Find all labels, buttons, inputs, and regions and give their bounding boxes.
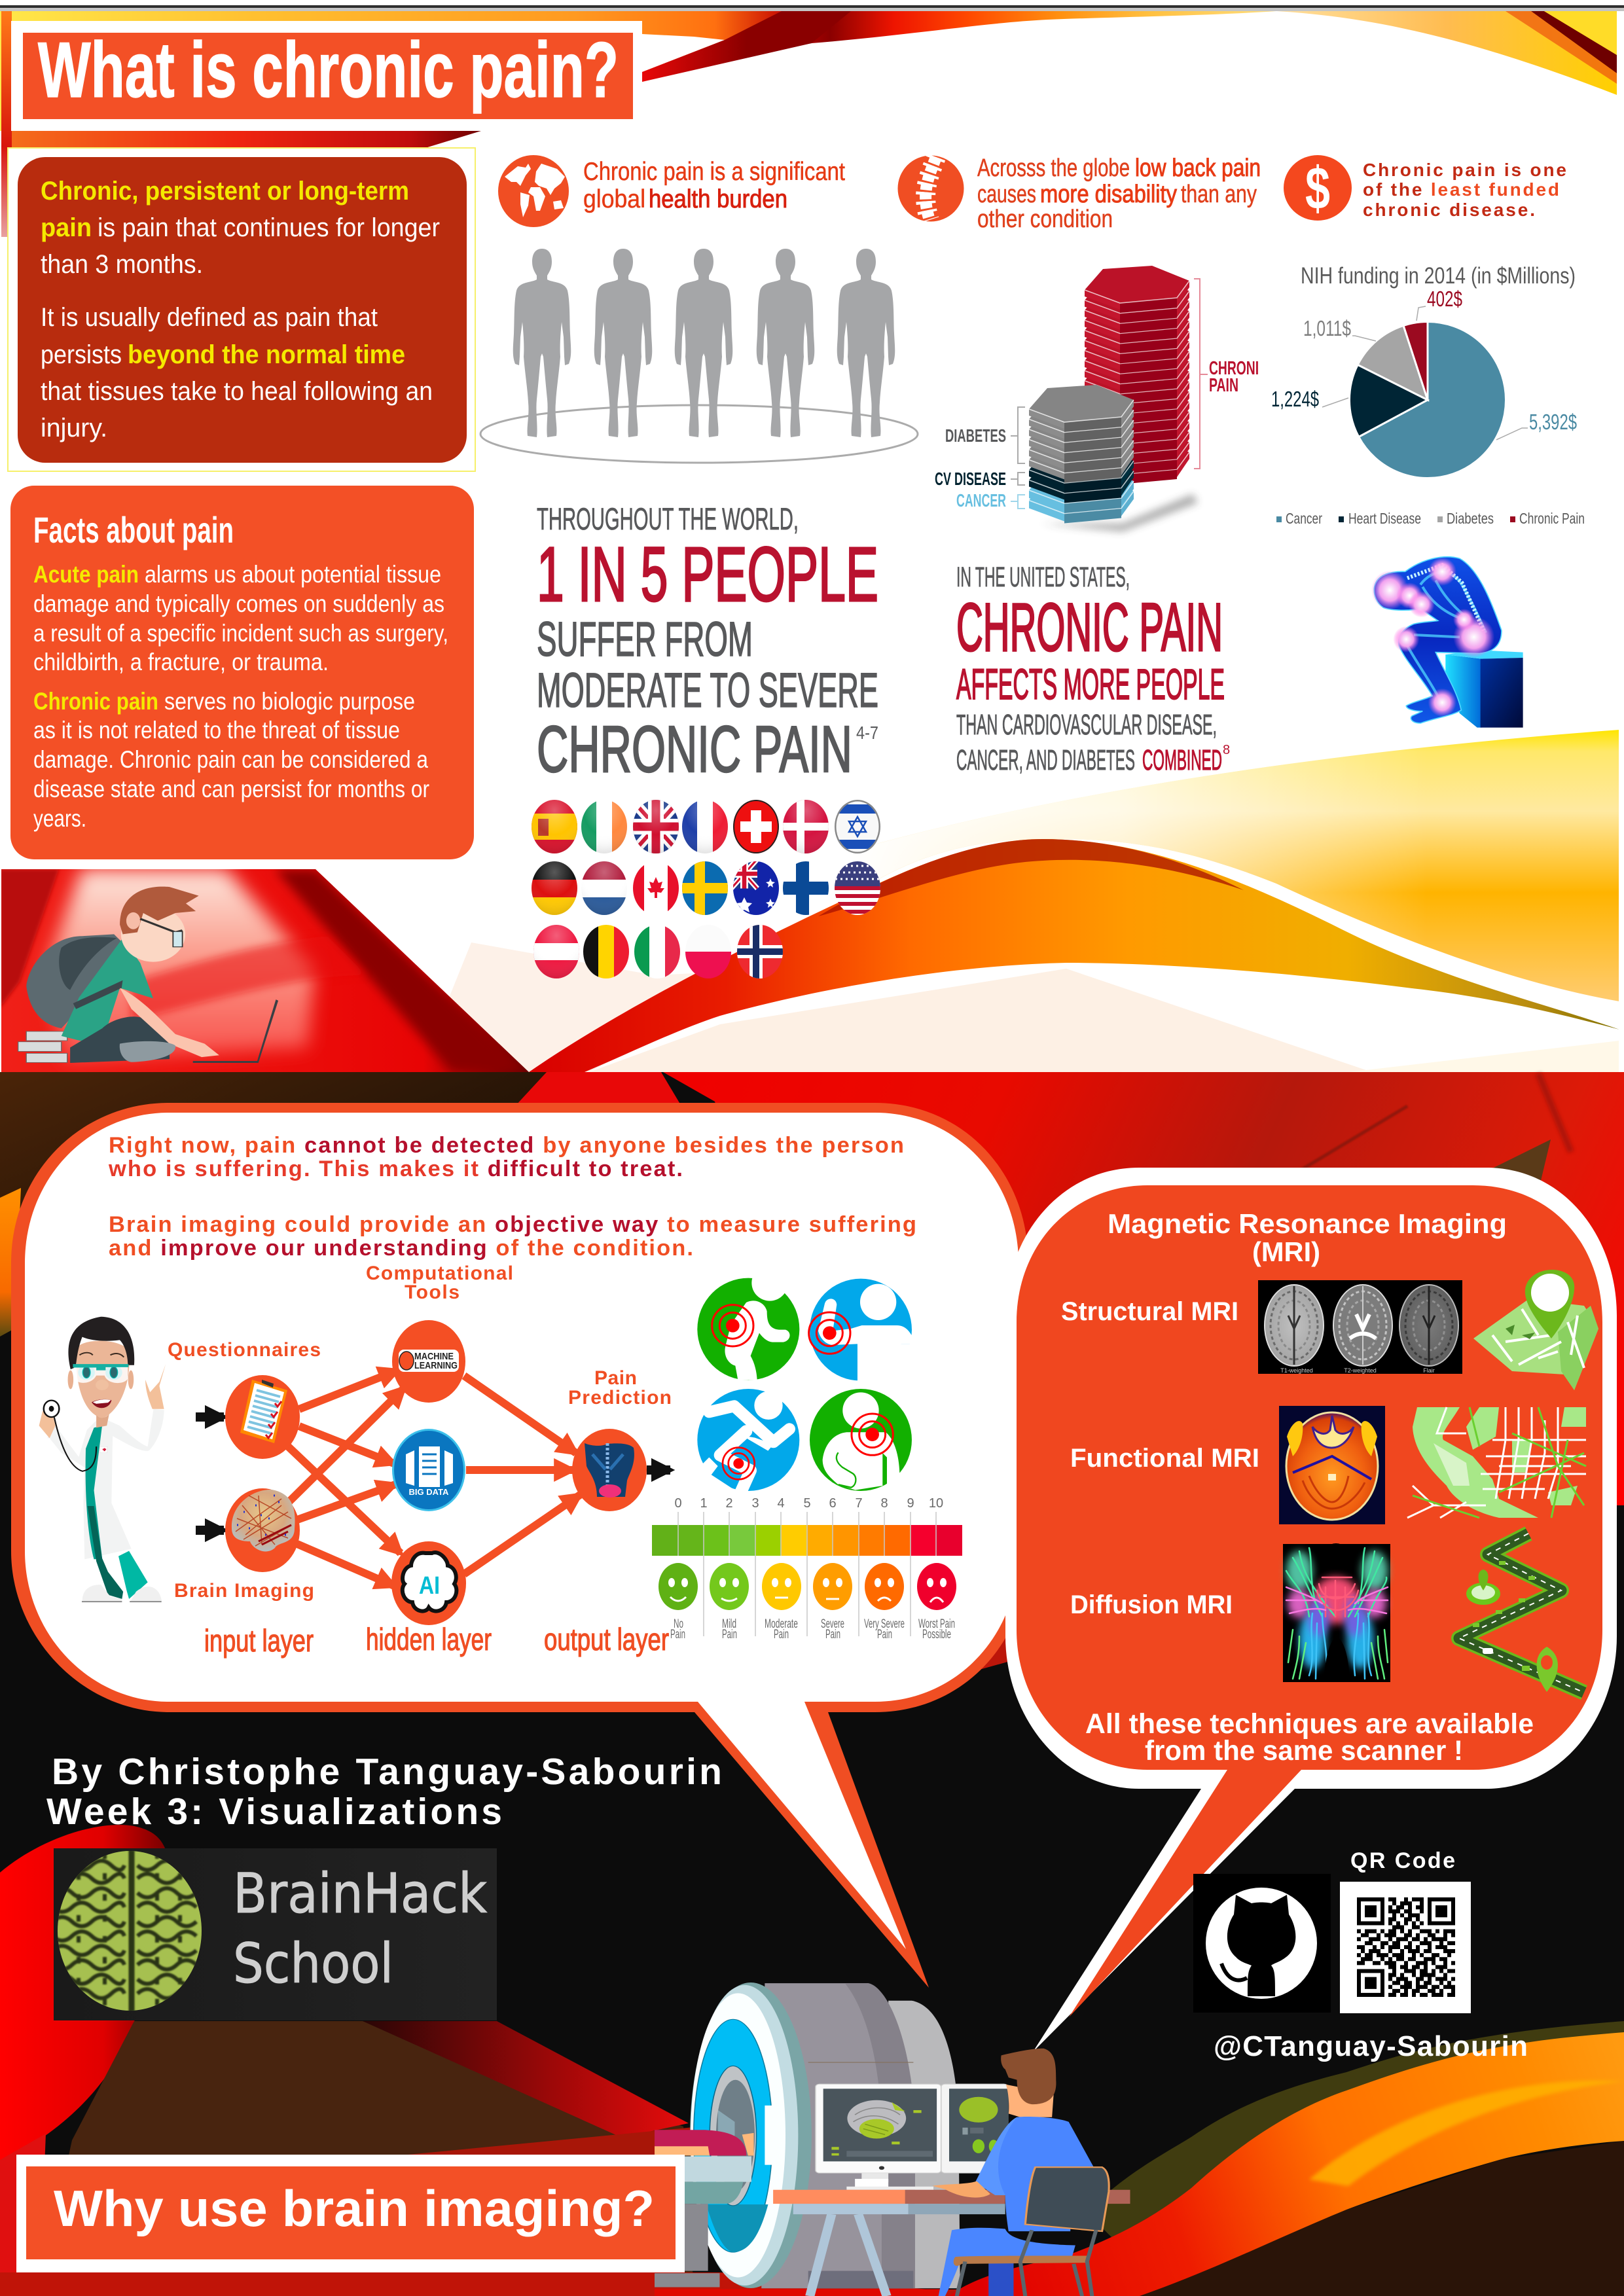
figure: five human silhouettes on ellipse: [480, 249, 918, 463]
chart: NIH funding pie: 402$: [1427, 287, 1462, 311]
labels: network diagram: output layer: [544, 1622, 669, 1657]
statistic: affects more people: COMBINED: [1142, 744, 1222, 776]
text: same scanner: from the same scanner !: [1145, 1735, 1463, 1767]
text: same scanner: All these techniques are available: [1085, 1708, 1534, 1740]
text: global health burden: health burden: [649, 185, 787, 213]
node: artificial intelligence: AI: [419, 1572, 440, 1600]
author credit: By Christophe Tanguay-Sabourin: [52, 1751, 722, 1793]
panel: chronic pain definition: beyond the normal time: [128, 340, 405, 369]
labels: network diagram: Questionnaires: [168, 1339, 321, 1361]
row: structural MRI: T1-weighted: [1280, 1367, 1313, 1374]
chart: hexagon stacks by prevalence: [935, 266, 1268, 531]
panel: chronic pain definition: pain: [41, 213, 92, 242]
input arrows: [196, 1417, 670, 1530]
panel: chronic pain definition: injury.: [41, 414, 107, 442]
panel: chronic pain definition: Chronic, persistent or long-term: [41, 177, 409, 206]
panel: chronic pain definition: It is usually defined as pain that: [41, 303, 378, 332]
statistic: 1 in 5 people: CHRONIC PAIN: [537, 713, 852, 786]
logo: BrainHack School: [52, 1848, 497, 2020]
handle: CTanguay-Sabourin: @CTanguay-Sabourin: [1214, 2030, 1528, 2062]
text: global health burden: [583, 158, 845, 213]
node: machine learning: [392, 1320, 465, 1403]
chart: hexagon stacks by prevalence: CANCER: [956, 490, 1006, 511]
row: diffusion MRI: Diffusion MRI: [1070, 1590, 1233, 1619]
row: structural MRI: [1061, 1280, 1462, 1374]
title banner: What is chronic pain?: What is chronic pain?: [38, 26, 619, 114]
statistic: 1 in 5 people: 4-7: [856, 723, 878, 743]
panel: facts about pain: disease state and can persist for months or: [33, 776, 429, 802]
icon: dollar: $: [1305, 155, 1330, 222]
text: global health burden: Chronic pain is a significant: [583, 158, 845, 186]
text: global health burden: global: [583, 185, 645, 213]
panel: chronic pain definition: than 3 months.: [41, 250, 203, 279]
title banner: Why use brain imaging?: Why use brain imaging?: [54, 2179, 655, 2237]
text: MRI panel heading: [1108, 1208, 1507, 1267]
text: low back pain: low back pain: [1135, 154, 1261, 182]
labels: network diagram: input layer: [204, 1623, 314, 1658]
text: bubble introduction: Brain imaging could provide an objective way to measure suffering: [109, 1212, 916, 1237]
pain scale 0-10: 2: [725, 1496, 733, 1511]
text: bubble introduction: who is suffering. This makes it difficult to treat.: [108, 1157, 683, 1181]
chart: NIH funding pie: Diabetes: [1447, 510, 1494, 527]
speech bubble: MRI panel: [1005, 1168, 1617, 2052]
title banner: What is chronic pain?: [11, 21, 642, 131]
illustration: student with laptop: [18, 887, 278, 1063]
pain scale 0-10: 5: [803, 1496, 811, 1511]
logo: BrainHack School: School: [233, 1931, 393, 1996]
text: bubble introduction: Right now, pain cannot be detected by anyone besides the person: [109, 1133, 904, 1158]
statistic: affects more people: [956, 562, 1230, 776]
labels: network diagram: Computational: [366, 1263, 513, 1284]
labels: network diagram: hidden layer: [366, 1622, 492, 1657]
logo: BrainHack School: BrainHack: [233, 1861, 487, 1926]
icons: body pain targets: [697, 1265, 914, 1492]
text: low back pain: Acrosss the globe: [977, 154, 1130, 182]
pain scale 0-10: Pain: [877, 1628, 892, 1641]
statistic: affects more people: AFFECTS MORE PEOPLE: [956, 660, 1225, 708]
author credit: [46, 1751, 722, 1833]
text: least funded: [1363, 160, 1566, 220]
QR code: [1340, 1882, 1471, 2013]
author credit: Week 3: Visualizations: [46, 1791, 502, 1833]
labels: network diagram: [168, 1263, 672, 1658]
pain scale 0-10: 3: [751, 1496, 759, 1511]
panel: chronic pain definition: [8, 148, 475, 471]
chart: hexagon stacks by prevalence: PAIN: [1209, 375, 1238, 396]
statistic: 1 in 5 people: [537, 501, 878, 786]
row: functional MRI: [1070, 1406, 1385, 1524]
pain scale 0-10: Pain: [722, 1628, 737, 1641]
pain scale 0-10: 4: [777, 1496, 785, 1511]
panel: facts about pain: [10, 486, 474, 859]
row: structural MRI: T2-weighted: [1344, 1367, 1377, 1374]
labels: network diagram: Tools: [405, 1282, 460, 1303]
statistic: affects more people: THAN CARDIOVASCULAR DISEASE,: [956, 709, 1217, 741]
panel: facts about pain: serves no biologic purpose: [164, 688, 415, 715]
pain scale 0-10: Pain: [825, 1628, 840, 1641]
icon: city map: [1407, 1407, 1586, 1518]
pain scale 0-10: Mild: [722, 1617, 736, 1631]
labels: network diagram: Prediction: [568, 1387, 672, 1408]
node: big data: BIG DATA: [409, 1487, 449, 1497]
panel: facts about pain: Chronic pain: [33, 688, 158, 715]
pain scale 0-10: Very Severe: [864, 1617, 905, 1631]
icon: winding road: [1459, 1534, 1584, 1693]
chart: NIH funding pie: [1271, 263, 1585, 527]
node: pain prediction: [572, 1429, 647, 1511]
illustration: person with glowing joints on cube: [1371, 557, 1523, 728]
icon: folded map with pin: [1473, 1270, 1598, 1390]
text: low back pain: more disability: [1040, 181, 1177, 208]
panel: facts about pain: years.: [33, 805, 86, 832]
labels: network diagram: Pain: [594, 1367, 637, 1389]
pain scale 0-10: [652, 1496, 962, 1641]
panel: chronic pain definition: is pain that continues for longer: [98, 213, 440, 242]
text: least funded: Chronic pain is one: [1363, 160, 1566, 180]
text: low back pain: causes: [977, 181, 1036, 208]
statistic: affects more people: IN THE UNITED STATES,: [956, 562, 1130, 593]
chart: hexagon stacks by prevalence: CV DISEASE: [935, 469, 1006, 489]
background: top white section: [0, 0, 1624, 1073]
text: same scanner: [1085, 1708, 1534, 1767]
pain scale 0-10: 0: [674, 1496, 682, 1511]
pain scale 0-10: Pain: [670, 1628, 685, 1641]
statistic: affects more people: CANCER, AND DIABETES: [956, 744, 1135, 776]
node: big data: [392, 1429, 465, 1511]
flags of countries: [528, 797, 884, 981]
panel: chronic pain definition: persists: [41, 340, 122, 369]
panel: facts about pain: alarms us about potential tissue: [145, 561, 441, 588]
text: bubble introduction: and improve our understanding of the condition.: [109, 1236, 693, 1261]
icon: dollar: [1284, 155, 1352, 222]
chart: hexagon stacks by prevalence: DIABETES: [945, 425, 1006, 446]
background: bottom dark section: [0, 1072, 1624, 2296]
panel: facts about pain: damage. Chronic pain can be considered a: [33, 746, 428, 773]
node: questionnaires: [225, 1375, 300, 1459]
pain scale 0-10: Possible: [922, 1628, 951, 1641]
icon: spine: [898, 156, 964, 221]
statistic: 1 in 5 people: MODERATE TO SEVERE: [537, 663, 878, 717]
statistic: 1 in 5 people: 1 IN 5 PEOPLE: [537, 531, 878, 618]
node: machine learning: MACHINE: [414, 1351, 454, 1362]
pain scale 0-10: Severe: [821, 1617, 844, 1631]
icon: globe: [498, 155, 569, 227]
text: low back pain: [977, 154, 1261, 233]
text: MRI panel heading: (MRI): [1252, 1236, 1320, 1267]
panel: facts about pain: Facts about pain: [33, 509, 234, 550]
pain scale 0-10: Pain: [774, 1628, 789, 1641]
illustration: MRI scanner with operator: [655, 1982, 1130, 2296]
node: machine learning: LEARNING: [414, 1360, 458, 1371]
statistic: 1 in 5 people: THROUGHOUT THE WORLD,: [537, 501, 799, 536]
panel: facts about pain: Acute pain: [33, 561, 139, 588]
pain scale 0-10: 8: [880, 1496, 888, 1511]
text: least funded: of the least funded: [1363, 179, 1559, 200]
row: functional MRI: Functional MRI: [1070, 1444, 1259, 1473]
statistic: affects more people: CHRONIC PAIN: [956, 590, 1223, 666]
pain scale 0-10: No: [674, 1617, 683, 1631]
labels: network diagram: Brain Imaging: [174, 1580, 314, 1602]
panel: facts about pain: as it is not related to the threat of tissue: [33, 717, 400, 744]
text: low back pain: than any: [1181, 181, 1257, 208]
chart: NIH funding pie: Cancer: [1286, 510, 1322, 527]
pain scale 0-10: 10: [929, 1496, 943, 1511]
label: QR code: QR Code: [1350, 1848, 1455, 1873]
statistic: affects more people: 8: [1223, 743, 1230, 757]
text: least funded: chronic disease.: [1363, 200, 1535, 220]
pain scale 0-10: 1: [700, 1496, 708, 1511]
panel: facts about pain: damage and typically comes on suddenly as: [33, 590, 444, 617]
chart: NIH funding pie: 5,392$: [1529, 410, 1577, 434]
chart: NIH funding pie: Heart Disease: [1348, 510, 1421, 527]
node: brain imaging: [225, 1488, 300, 1572]
chart: hexagon stacks by prevalence: CHRONIC: [1209, 358, 1268, 379]
illustration: doctor: [39, 1317, 166, 1602]
icon: GitHub logo: [1193, 1874, 1331, 2013]
row: structural MRI: Structural MRI: [1061, 1297, 1238, 1326]
chart: NIH funding pie: 1,011$: [1303, 316, 1351, 340]
chart: NIH funding pie: 1,224$: [1271, 387, 1319, 411]
title banner: Why use brain imaging?: [16, 2155, 685, 2272]
panel: facts about pain: a result of a specific incident such as surgery,: [33, 620, 448, 647]
pain scale 0-10: 6: [829, 1496, 837, 1511]
network arrows: [287, 1371, 580, 1586]
text: low back pain: other condition: [977, 206, 1113, 233]
chart: NIH funding pie: Chronic Pain: [1519, 510, 1585, 527]
statistic: 1 in 5 people: SUFFER FROM: [537, 612, 753, 666]
pain scale 0-10: Moderate: [765, 1617, 798, 1631]
node: artificial intelligence: [391, 1541, 466, 1625]
panel: chronic pain definition: that tissues take to heal following an: [41, 377, 433, 406]
row: structural MRI: Flair: [1423, 1367, 1435, 1374]
text: bubble introduction: [108, 1133, 916, 1261]
pain scale 0-10: 7: [855, 1496, 863, 1511]
text: MRI panel heading: Magnetic Resonance Imaging: [1108, 1208, 1507, 1239]
row: diffusion MRI: [1070, 1543, 1390, 1682]
pain scale 0-10: 9: [907, 1496, 914, 1511]
speech bubble: brain imaging explanation: [11, 1103, 1028, 1988]
pain scale 0-10: Worst Pain: [918, 1617, 955, 1631]
panel: facts about pain: childbirth, a fracture, or trauma.: [33, 649, 329, 675]
